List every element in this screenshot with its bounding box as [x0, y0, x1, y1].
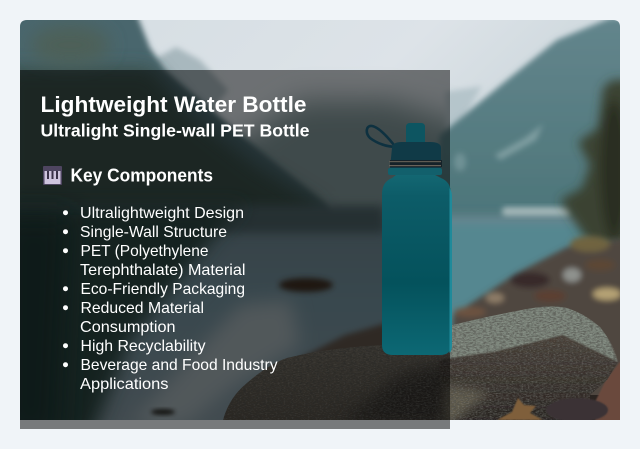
list item: high recyclability: High Recyclability: [80, 338, 206, 355]
list item: beverage and food applications: Beverage and Food Industry: [80, 357, 278, 374]
list item: single-wall structure: Single-Wall Structure: [80, 224, 227, 241]
distant hump: [156, 46, 228, 110]
bottle body: [382, 175, 451, 355]
dark shore behind rock: [302, 322, 382, 354]
lake: [88, 214, 572, 420]
dark shore reflection: [20, 206, 232, 420]
lake right teal: [452, 221, 584, 326]
rock lower face: [440, 336, 618, 395]
list item: reduced material consumption: [63, 300, 204, 336]
snow streaks: [495, 124, 543, 160]
list item: ultralightweight design: Ultralightweight Design: [80, 205, 244, 222]
tree: [560, 80, 630, 245]
subtitle: Ultralight Single-wall PET Bottle: [40, 120, 310, 140]
rock texture: [288, 306, 617, 420]
bottle handle loop: [367, 126, 398, 147]
bottle cap: [390, 142, 441, 168]
list item: beverage and food applications: Applications: [80, 376, 168, 393]
bottle spout: [406, 123, 425, 142]
left mountain: [20, 20, 324, 206]
left mountain moss: [30, 25, 110, 65]
bottom right leaf litter: [590, 395, 599, 420]
small stone: [151, 409, 175, 415]
water bottle: [367, 123, 452, 355]
list item: PET material: PET (Polyethylene: [80, 243, 209, 260]
list item: reduced material consumption: Consumption: [80, 319, 176, 336]
shore pebbles: [452, 234, 620, 395]
panel text: [40, 92, 310, 393]
far shore light band: [502, 207, 572, 216]
right mountain: [436, 20, 620, 222]
lake light reflection: [144, 298, 300, 420]
list item: eco-friendly packaging: Eco-Friendly Packaging: [80, 281, 245, 298]
list item: beverage and food applications: [63, 357, 278, 393]
bottle collar: [388, 168, 442, 175]
horizon shadow: [220, 202, 382, 234]
section heading: Key Components: [70, 166, 213, 186]
list item: PET material: Terephthalate) Material: [80, 262, 246, 279]
right haze: [446, 85, 481, 128]
left mountain dark slope: [20, 60, 312, 206]
title: Lightweight Water Bottle: [40, 92, 306, 117]
hazy far hills: [238, 87, 448, 212]
sky: [138, 20, 620, 127]
list item: reduced material consumption: Reduced Material: [80, 300, 204, 317]
rock: [223, 306, 618, 420]
rock top facet: [450, 303, 618, 362]
icon: piano keys: [43, 166, 62, 185]
translucent overlay panel: [20, 70, 450, 429]
rock shade under bottle: [354, 358, 450, 420]
list item: PET material: [63, 243, 246, 279]
lake stone: [279, 278, 333, 292]
component list: [63, 205, 278, 393]
bottom leaves and stone: [497, 398, 608, 422]
